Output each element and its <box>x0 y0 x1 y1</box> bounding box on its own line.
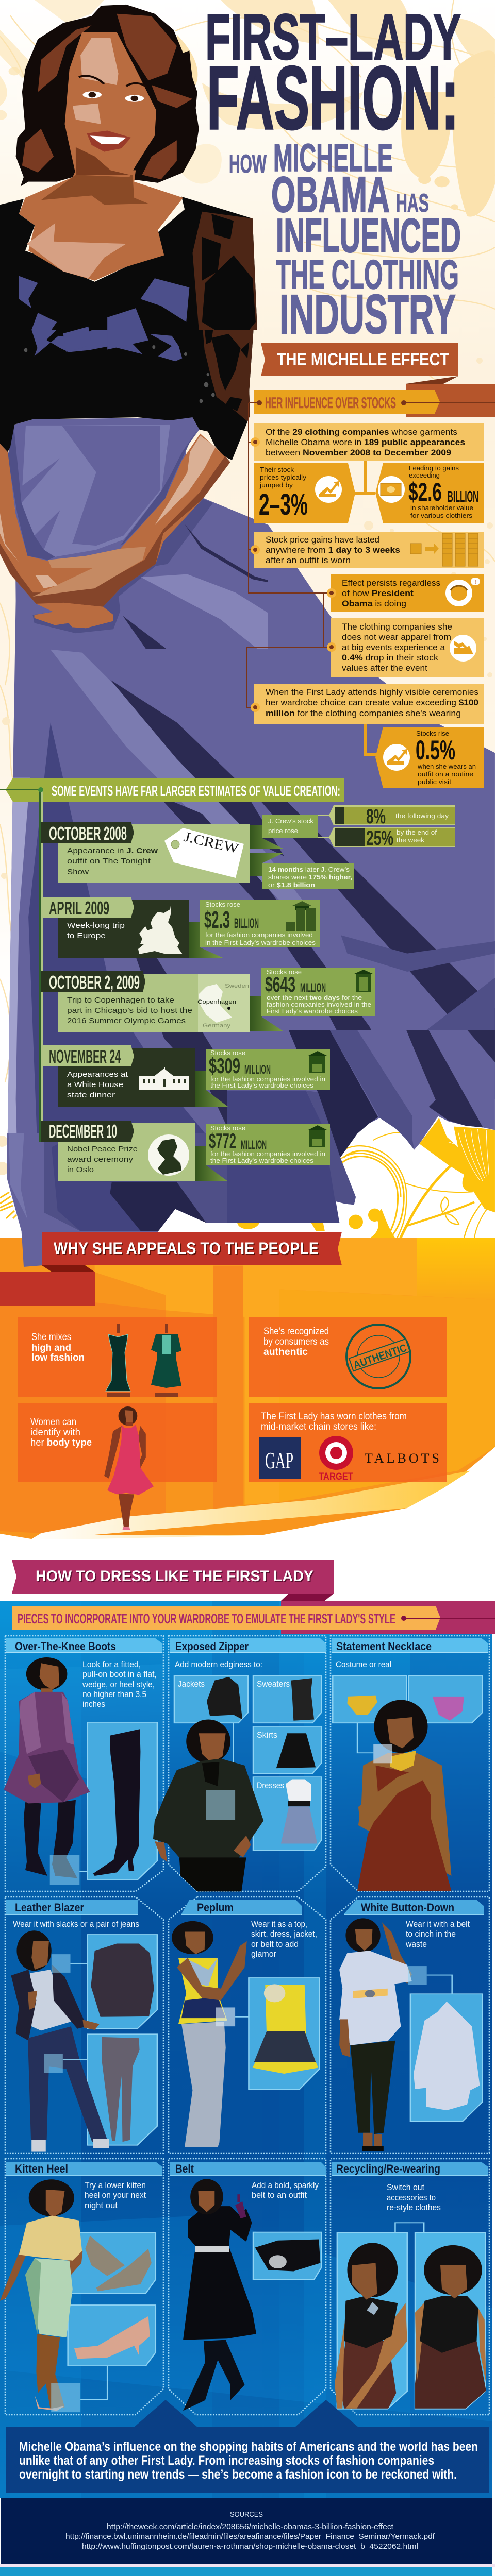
arms and clasped hands <box>0 432 268 649</box>
panel: exposed zipper <box>153 1638 326 1891</box>
sources <box>1 2498 492 2564</box>
stock callout: 772 million: the First Lady's wardrobe choices <box>210 1157 314 1164</box>
description <box>251 1919 317 1959</box>
header: Peplum <box>197 1901 234 1914</box>
header: Recycling/Re-wearing <box>336 2162 440 2175</box>
stat panel: 2-3% price jump <box>254 463 355 523</box>
description: to cinch in the <box>406 1929 456 1939</box>
event: December 10: in Oslo <box>67 1165 94 1174</box>
stock callout: 309 million: $309 <box>209 1054 240 1078</box>
stat panel: 2-3% price jump: Their stock <box>260 466 294 473</box>
event: November 24: state dinner <box>67 1091 115 1099</box>
icon: Nobel medal <box>148 1134 189 1176</box>
stat panel: effect regardless of president: of how President <box>342 589 414 598</box>
two outfits compared <box>335 2223 486 2409</box>
description: wedge, or heel style, <box>82 1680 155 1689</box>
icon: rising chart <box>315 476 342 503</box>
description: belt to an outfit <box>252 2190 307 2200</box>
stat panel: 100 million ceremonies: million for the clothing companies she's wearing <box>266 709 461 718</box>
description: Wear it with slacks or a pair of jeans <box>13 1919 139 1929</box>
stock callout: 772 million: Stocks rose <box>210 1124 245 1132</box>
description: re-style clothes <box>387 2202 441 2212</box>
stat panel: 2.6 billion gain: exceeding <box>409 471 440 479</box>
icon: mannequin dresses <box>106 1324 182 1397</box>
event: October 2008: OCTOBER 2008 <box>49 823 127 844</box>
stat panel: 29 companies <box>254 423 484 461</box>
header <box>6 2162 162 2176</box>
stock callout: 643 million: Stocks rose <box>267 968 302 976</box>
stat panel: 2.6 billion gain: for various clothiers <box>410 512 473 519</box>
stock callout: J. Crew's stock price: J. Crew’s stock <box>268 817 314 825</box>
stat panel: duration of gains <box>254 532 484 568</box>
description: pull-on boot in a flat, <box>82 1669 157 1679</box>
stat panel: 2.6 billion gain: $2.6 <box>408 478 442 506</box>
heading ribbon: HOW TO DRESS LIKE THE FIRST LADY <box>37 1569 315 1586</box>
header <box>170 2162 326 2176</box>
section: the Michelle effect <box>247 343 495 788</box>
stat panel: stocks rise 0.5%: public visit <box>418 778 451 786</box>
title: MICHELLE <box>273 136 393 179</box>
stat panel: stocks rise 0.5%: outfit on a routine <box>418 770 473 778</box>
connector to 0.5% panel <box>365 724 376 755</box>
event: October 2008: Appearance in J. Crew <box>67 846 158 855</box>
swatch label: jackets: Jackets <box>178 1679 205 1689</box>
header: Leather Blazer <box>15 1901 84 1914</box>
event: December 10: award ceremony <box>67 1155 134 1164</box>
event: November 24: Appearances at <box>67 1070 128 1079</box>
stat panel: 0.4% drop: at big events experience a <box>342 643 446 652</box>
logo: GAP <box>259 1437 301 1479</box>
timeline connectors <box>247 400 495 712</box>
floral cream background <box>0 0 495 1242</box>
description: heel on your next <box>85 2190 146 2200</box>
stat bar: 25 percent: the week <box>397 836 425 844</box>
stock callout: J. Crew's stock price: price rose <box>268 827 298 835</box>
stat panel: 2-3% price jump: jumped by <box>259 481 293 489</box>
header <box>182 1900 302 1915</box>
yellow flower artwork <box>237 1118 495 1238</box>
stat panel: 2-3% price jump: 2–3% <box>259 488 308 521</box>
stock callout: 2.3 billion <box>200 900 320 947</box>
event: December 10 <box>41 1121 330 1181</box>
stock callout: 643 million: $643 <box>265 972 295 996</box>
panel: peplum <box>172 1900 320 2147</box>
header: White Button-Down <box>361 1901 454 1914</box>
heading ribbon: WHY SHE APPEALS TO THE PEOPLE <box>55 1240 320 1259</box>
figure and boot detail <box>4 1657 157 1885</box>
illustration: Michelle Obama in lavender gown <box>0 5 495 1247</box>
event: October 2 2009 <box>41 968 375 1032</box>
stock callout: 2.3 billion: in the First Lady's wardrobe choices <box>205 939 316 946</box>
header <box>332 2162 488 2176</box>
event: October 2008: Show <box>67 868 89 876</box>
stock callout: 309 million: Stocks rose <box>210 1049 245 1057</box>
stat panel: 29 companies: Of the 29 clothing companies whose garments <box>266 428 457 437</box>
sub-heading banner <box>12 1606 495 1630</box>
section: why she appeals <box>0 1232 495 1539</box>
icon: money with arrow <box>353 970 374 992</box>
icon: rising chart <box>383 744 410 771</box>
icon: calendars and arrow <box>410 533 478 566</box>
header: Over-The-Knee Boots <box>15 1640 116 1653</box>
logo: GAP: GAP <box>265 1447 293 1473</box>
heading ribbon <box>0 1232 342 1306</box>
panel: kitten heel <box>0 2162 162 2412</box>
map of Copenhagen: Sweden <box>225 983 249 989</box>
section: events with larger value <box>0 778 455 1181</box>
event: October 2 2009: OCTOBER 2, 2009 <box>49 972 140 993</box>
icon: money with arrow <box>307 1125 328 1147</box>
event: November 24 <box>41 1045 330 1107</box>
footer: BlueGala brand <box>0 2564 495 2576</box>
description: accessories to <box>387 2193 436 2202</box>
panel: high and low fashion: low fashion <box>31 1352 85 1363</box>
description: Switch out <box>387 2182 424 2192</box>
stock callout: 309 million: MILLION <box>244 1063 271 1077</box>
figure: woman in pink dress <box>104 1406 154 1530</box>
heading ribbon <box>261 343 495 417</box>
heading ribbon <box>12 1560 495 1634</box>
stat bar: 25 percent <box>329 827 455 850</box>
panel: high and low fashion: She mixes <box>31 1332 71 1343</box>
callout: conclusion <box>6 2400 489 2493</box>
stat bar: 25 percent: by the end of <box>397 828 437 836</box>
stat panel: 100 million ceremonies: When the First Lady attends highly visible ceremonies <box>266 688 478 697</box>
event: October 2 2009: Trip to Copenhagen to take <box>67 996 174 1005</box>
sources: SOURCES <box>230 2510 263 2519</box>
necklaces and figure <box>333 1676 482 1891</box>
event: April 2009: APRIL 2009 <box>49 897 109 919</box>
stock callout: J. Crew's stock price <box>262 815 330 838</box>
title: HOW <box>229 149 267 178</box>
stat panel: duration of gains: anywhere from 1 day to 3 weeks <box>266 546 400 555</box>
panel: authentic <box>249 1317 447 1397</box>
stat panel: stocks rise 0.5%: when she wears an <box>417 762 476 770</box>
panel: over-the-knee boots <box>4 1638 162 1885</box>
event: October 2 2009: part in Chicago’s bid to host the <box>67 1006 192 1015</box>
panel: mid-market stores <box>249 1403 447 1482</box>
stat panel: 0.4% drop <box>331 618 484 677</box>
description: night out <box>85 2200 118 2210</box>
stat panel: 100 million ceremonies: her wardrobe choice can create value exceeding $100 <box>266 698 478 707</box>
icon: White House <box>139 1067 189 1090</box>
stat panel: 100 million ceremonies <box>254 684 484 724</box>
panel: authentic: authentic <box>263 1347 308 1358</box>
figure with jacket and jeans swatches <box>11 1930 157 2152</box>
stat panel: 2.6 billion gain: in shareholder value <box>410 504 473 512</box>
stat panel: 29 companies: Michelle Obama wore in 189 public appearances <box>266 438 465 447</box>
panel: leather blazer <box>6 1900 157 2152</box>
heading ribbon: THE MICHELLE EFFECT <box>277 350 449 369</box>
panel: body type: her body type <box>30 1437 92 1448</box>
sources: http://theweek.com/article/index/208656/michelle-obamas-3-billion-fashion-effect <box>107 2522 394 2531</box>
icon: falling chart <box>450 635 476 662</box>
figure with shoe swatches <box>0 2179 156 2412</box>
event: April 2009 <box>41 897 320 958</box>
stock callout: 2.3 billion: Stocks rose <box>205 901 240 908</box>
stat bar: 8 percent: the following day <box>395 812 449 820</box>
stock callout: 772 million: MILLION <box>241 1138 267 1152</box>
stat panel: 29 companies: between November 2008 to December 2009 <box>266 448 451 457</box>
stock callout: 643 million: over the next two days for the <box>267 994 362 1002</box>
stat bar: 25 percent: 25% <box>366 827 393 850</box>
timeline line <box>0 787 43 1142</box>
sub-heading banner <box>254 390 440 414</box>
blue backdrop <box>0 1601 492 2498</box>
stock callout: 772 million <box>206 1124 330 1165</box>
stat panel: effect regardless of president <box>331 574 484 612</box>
description: Wear it as a top, <box>251 1919 307 1929</box>
description <box>405 1919 470 1949</box>
header: Kitten Heel <box>15 2162 68 2175</box>
event: April 2009: to Europe <box>67 931 106 940</box>
section: how to dress like the first lady <box>0 1560 495 2564</box>
icon: authentic stamp <box>346 1325 410 1388</box>
connector between stat panels <box>355 461 375 495</box>
icon: money stacks with arrow <box>286 901 316 931</box>
stock callout: 309 million: for the fashion companies involved in <box>210 1075 325 1083</box>
event: April 2009: Week-long trip <box>67 921 125 930</box>
panel: high and low fashion <box>18 1317 217 1397</box>
stat panel: stocks rise 0.5% <box>375 727 484 788</box>
description: glamor <box>251 1949 276 1959</box>
stock callout: 2.3 billion: for the fashion companies involved <box>205 931 313 939</box>
map of Copenhagen: Copenhagen <box>197 999 236 1005</box>
header <box>6 1900 138 1915</box>
panel: white button-down <box>339 1900 484 2151</box>
figure with peplum swatch <box>172 1921 320 2147</box>
gown hem over the orange <box>22 1234 68 1267</box>
header <box>6 1638 162 1653</box>
stock callout: 14 months later: 14 months later J. Crew’s <box>268 866 350 873</box>
description: Add a bold, sparkly <box>252 2180 319 2190</box>
panel: body type: Women can <box>30 1417 76 1428</box>
stock callout: 14 months later: or $1.8 billion <box>268 881 315 889</box>
swatch label: sweaters: Sweaters <box>257 1679 290 1689</box>
panel: statement necklace <box>332 1638 488 1891</box>
event: October 2008 <box>41 805 455 889</box>
event: October 2 2009: 2016 Summer Olympic Games <box>67 1016 186 1025</box>
gown skirt <box>7 425 495 1247</box>
description: Costume or real <box>336 1659 391 1669</box>
stat panel: stocks rise 0.5%: Stocks rise <box>416 730 449 737</box>
description: no higher than 3.5 <box>82 1689 146 1699</box>
panel: authentic: by consumers as <box>263 1336 329 1347</box>
swatch label: dresses: Dresses <box>257 1781 284 1790</box>
title <box>205 2 461 345</box>
header: Exposed Zipper <box>175 1640 249 1653</box>
header <box>344 1900 484 1915</box>
description: Wear it with a belt <box>406 1919 470 1929</box>
stat panel: 0.4% drop: The clothing companies she <box>342 622 452 632</box>
icon: map of Europe <box>138 902 183 954</box>
header: Statement Necklace <box>336 1640 432 1653</box>
icon: J.Crew tag <box>164 828 244 878</box>
stock callout: 643 million: First Lady's wardrobe choices <box>267 1007 358 1015</box>
figure with shirt swatch <box>339 1918 482 2151</box>
description <box>387 2182 441 2212</box>
stat panel: 0.4% drop: values after the event <box>342 664 427 673</box>
map of Copenhagen <box>197 974 250 1032</box>
stat panel: duration of gains: Stock price gains have lasted <box>266 535 380 545</box>
description: waste <box>405 1939 427 1949</box>
icon: J.Crew tag: J.CREW <box>183 829 240 856</box>
title: HAS <box>396 189 429 217</box>
icon: authentic stamp: AUTHENTIC <box>352 1342 408 1371</box>
sources: http://www.huffingtonpost.com/lauren-a-rothman/shop-michelle-obama-closet_b_4522062.html <box>82 2542 418 2551</box>
stat panel: duration of gains: after an outfit is worn <box>266 556 351 565</box>
description: Try a lower kitten <box>85 2180 146 2190</box>
description <box>82 1659 157 1709</box>
neck, face and hair <box>0 5 257 352</box>
figure with belt swatch <box>183 2179 321 2411</box>
stock callout: 309 million <box>206 1049 330 1090</box>
green banner <box>6 778 344 802</box>
description: Add modern edginess to: <box>175 1659 262 1669</box>
icon: President Obama face: ! <box>474 579 476 585</box>
description: Look for a fitted, <box>82 1659 141 1669</box>
stat panel: stocks rise 0.5%: 0.5% <box>416 735 455 766</box>
description: skirt, dress, jacket, <box>251 1929 317 1939</box>
header <box>332 1638 488 1653</box>
swatch label: skirts: Skirts <box>257 1730 277 1740</box>
panel: body type <box>18 1403 217 1482</box>
header: Belt <box>175 2162 194 2175</box>
heading ribbon: HOW TO DRESS LIKE THE FIRST LADY <box>36 1568 314 1585</box>
description: or belt to add <box>251 1939 299 1949</box>
stat panel: 2.6 billion gain <box>375 463 484 523</box>
panel: belt <box>170 2162 326 2411</box>
stock callout: 643 million: MILLION <box>300 981 326 995</box>
event: November 24: a White House <box>67 1080 123 1089</box>
stock callout: 309 million: the First Lady's wardrobe choices <box>210 1081 314 1089</box>
panel: high and low fashion: high and <box>31 1343 71 1353</box>
stock callout: 2.3 billion: $2.3 <box>204 906 230 933</box>
title: OBAMA <box>271 166 390 223</box>
stock callout: 772 million: $772 <box>209 1129 236 1153</box>
logo: Target: TARGET <box>319 1471 353 1482</box>
icon: President Obama face <box>446 578 480 606</box>
stock callout: 643 million <box>261 968 375 1016</box>
sources: http://finance.bwl.unimannheim.de/fileadmin/files/areafinance/files/Paper_Finance_Seminar/Yermack.pdf <box>65 2532 435 2541</box>
garment swatches and figure <box>153 1676 321 1891</box>
event: December 10: DECEMBER 10 <box>49 1121 117 1142</box>
panel: body type: identify with <box>30 1427 80 1438</box>
stat panel: 2-3% price jump: prices typically <box>260 473 307 481</box>
gown bodice in black lace <box>0 330 254 562</box>
event: October 2008: outfit on The Tonight <box>67 857 151 866</box>
panel: mid-market stores: The First Lady has worn clothes from <box>261 1411 407 1422</box>
logo: Target <box>319 1436 353 1482</box>
stat panel: effect regardless of president: Effect persists regardless <box>342 579 440 588</box>
logo: Talbots: TALBOTS <box>365 1451 439 1466</box>
stat bar: 8 percent <box>329 805 455 828</box>
stat panel: 2.6 billion gain: Leading to gains <box>409 464 459 472</box>
stock callout: 2.3 billion: BILLION <box>234 916 259 931</box>
panel: mid-market stores: mid-market chain stores like: <box>261 1421 376 1432</box>
description: inches <box>82 1699 105 1709</box>
stock callout: 772 million: for the fashion companies involved in <box>210 1150 325 1158</box>
stock callout: 14 months later: shares were 175% higher, <box>268 873 352 881</box>
panel: authentic: She’s recognized <box>263 1326 329 1337</box>
stat bar: 8 percent: 8% <box>366 805 386 828</box>
event: November 24: NOVEMBER 24 <box>49 1046 121 1067</box>
icon: money with arrow <box>307 1051 328 1073</box>
orange backdrop <box>0 1238 495 1539</box>
stat panel: 0.4% drop: 0.4% drop in their stock <box>342 653 439 663</box>
description <box>85 2180 146 2210</box>
stat panel: 0.4% drop: does not wear apparel from <box>342 633 451 642</box>
event: December 10: Nobel Peace Prize <box>67 1145 138 1154</box>
panel: recycling <box>332 2162 488 2409</box>
map of Copenhagen: Germany <box>203 1023 231 1029</box>
description <box>252 2180 319 2200</box>
stat panel: effect regardless of president: Obama is doing <box>342 599 406 608</box>
stock callout: 643 million: fashion companies involved in the <box>267 1001 371 1008</box>
header <box>170 1638 326 1653</box>
icon: banknote <box>378 476 405 503</box>
heading ribbon: WHY SHE APPEALS TO THE PEOPLE <box>54 1239 319 1258</box>
stock callout: 14 months later <box>262 863 354 889</box>
dotted panel borders <box>5 1636 489 2415</box>
